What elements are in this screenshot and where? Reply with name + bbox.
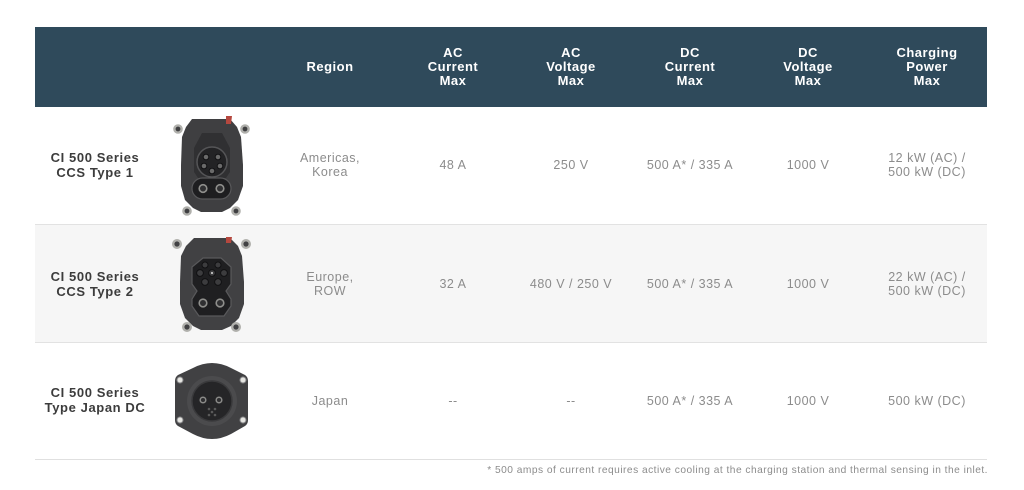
footnote: * 500 amps of current requires active cooling at the charging station and thermal sensing in the inlet. <box>487 465 988 476</box>
row 1 charging power <box>888 151 966 179</box>
row 3 DC current: 500 A* / 335 A <box>647 394 733 408</box>
header: DC Voltage Max: Voltage <box>783 59 833 74</box>
row 2 charging power <box>888 270 966 298</box>
row 1 name: CCS Type 1 <box>56 165 134 180</box>
header: DC Current Max: Max <box>677 73 703 88</box>
row 1 name <box>51 150 139 180</box>
row 2 background <box>35 224 987 343</box>
row 1 region: Korea <box>312 165 348 179</box>
header: AC Voltage Max <box>546 45 596 88</box>
row 3 AC voltage: -- <box>566 394 576 408</box>
row 3 region: Japan <box>312 394 348 408</box>
row 2 name: CI 500 Series <box>51 269 139 284</box>
row 2 DC current: 500 A* / 335 A <box>647 277 733 291</box>
row 2 AC current: 32 A <box>439 277 467 291</box>
table header band <box>35 27 987 107</box>
header: DC Voltage Max <box>783 45 833 88</box>
row 1 region <box>300 151 360 179</box>
header: Charging Power Max: Power <box>906 59 948 74</box>
row 1 AC voltage: 250 V <box>553 158 589 172</box>
row 3 name <box>44 385 145 415</box>
header: DC Voltage Max: DC <box>798 45 818 60</box>
row 2 region <box>306 270 354 298</box>
row 2 AC voltage: 480 V / 250 V <box>530 277 612 291</box>
header: Charging Power Max <box>896 45 958 88</box>
header: Charging Power Max: Max <box>914 73 940 88</box>
header: DC Current Max: Current <box>665 59 715 74</box>
header: AC Current Max: Max <box>440 73 466 88</box>
row 2 name <box>51 269 139 299</box>
row 3 AC current: -- <box>448 394 458 408</box>
header: AC Voltage Max: AC <box>561 45 581 60</box>
header: DC Current Max: DC <box>680 45 700 60</box>
row 3 name: Type Japan DC <box>45 400 145 415</box>
row 3 name: CI 500 Series <box>51 385 139 400</box>
row 2 DC voltage: 1000 V <box>787 277 829 291</box>
header: DC Voltage Max: Max <box>795 73 821 88</box>
header: AC Current Max <box>428 45 478 88</box>
row 1 DC current: 500 A* / 335 A <box>647 158 733 172</box>
row 2 charging power: 22 kW (AC) / <box>888 270 966 284</box>
row 2 charging power: 500 kW (DC) <box>888 284 966 298</box>
row 1 AC current: 48 A <box>439 158 467 172</box>
row 2 region: ROW <box>314 284 346 298</box>
header: AC Current Max: AC <box>443 45 463 60</box>
header: AC Voltage Max: Voltage <box>546 59 596 74</box>
row 1 charging power: 12 kW (AC) / <box>888 151 966 165</box>
header: DC Current Max <box>665 45 715 88</box>
header: Region: Region <box>306 59 354 74</box>
row 1 DC voltage: 1000 V <box>787 158 829 172</box>
bottom table rule <box>35 459 987 460</box>
row 3 charging power: 500 kW (DC) <box>888 394 966 408</box>
row 1 charging power: 500 kW (DC) <box>888 165 966 179</box>
header: Charging Power Max: Charging <box>896 45 958 60</box>
row 2 name: CCS Type 2 <box>56 284 134 299</box>
header: AC Current Max: Current <box>428 59 478 74</box>
row 1 name: CI 500 Series <box>51 150 139 165</box>
header: AC Voltage Max: Max <box>558 73 584 88</box>
row 1 region: Americas, <box>300 151 360 165</box>
row 3 DC voltage: 1000 V <box>787 394 829 408</box>
row 2 region: Europe, <box>306 270 354 284</box>
